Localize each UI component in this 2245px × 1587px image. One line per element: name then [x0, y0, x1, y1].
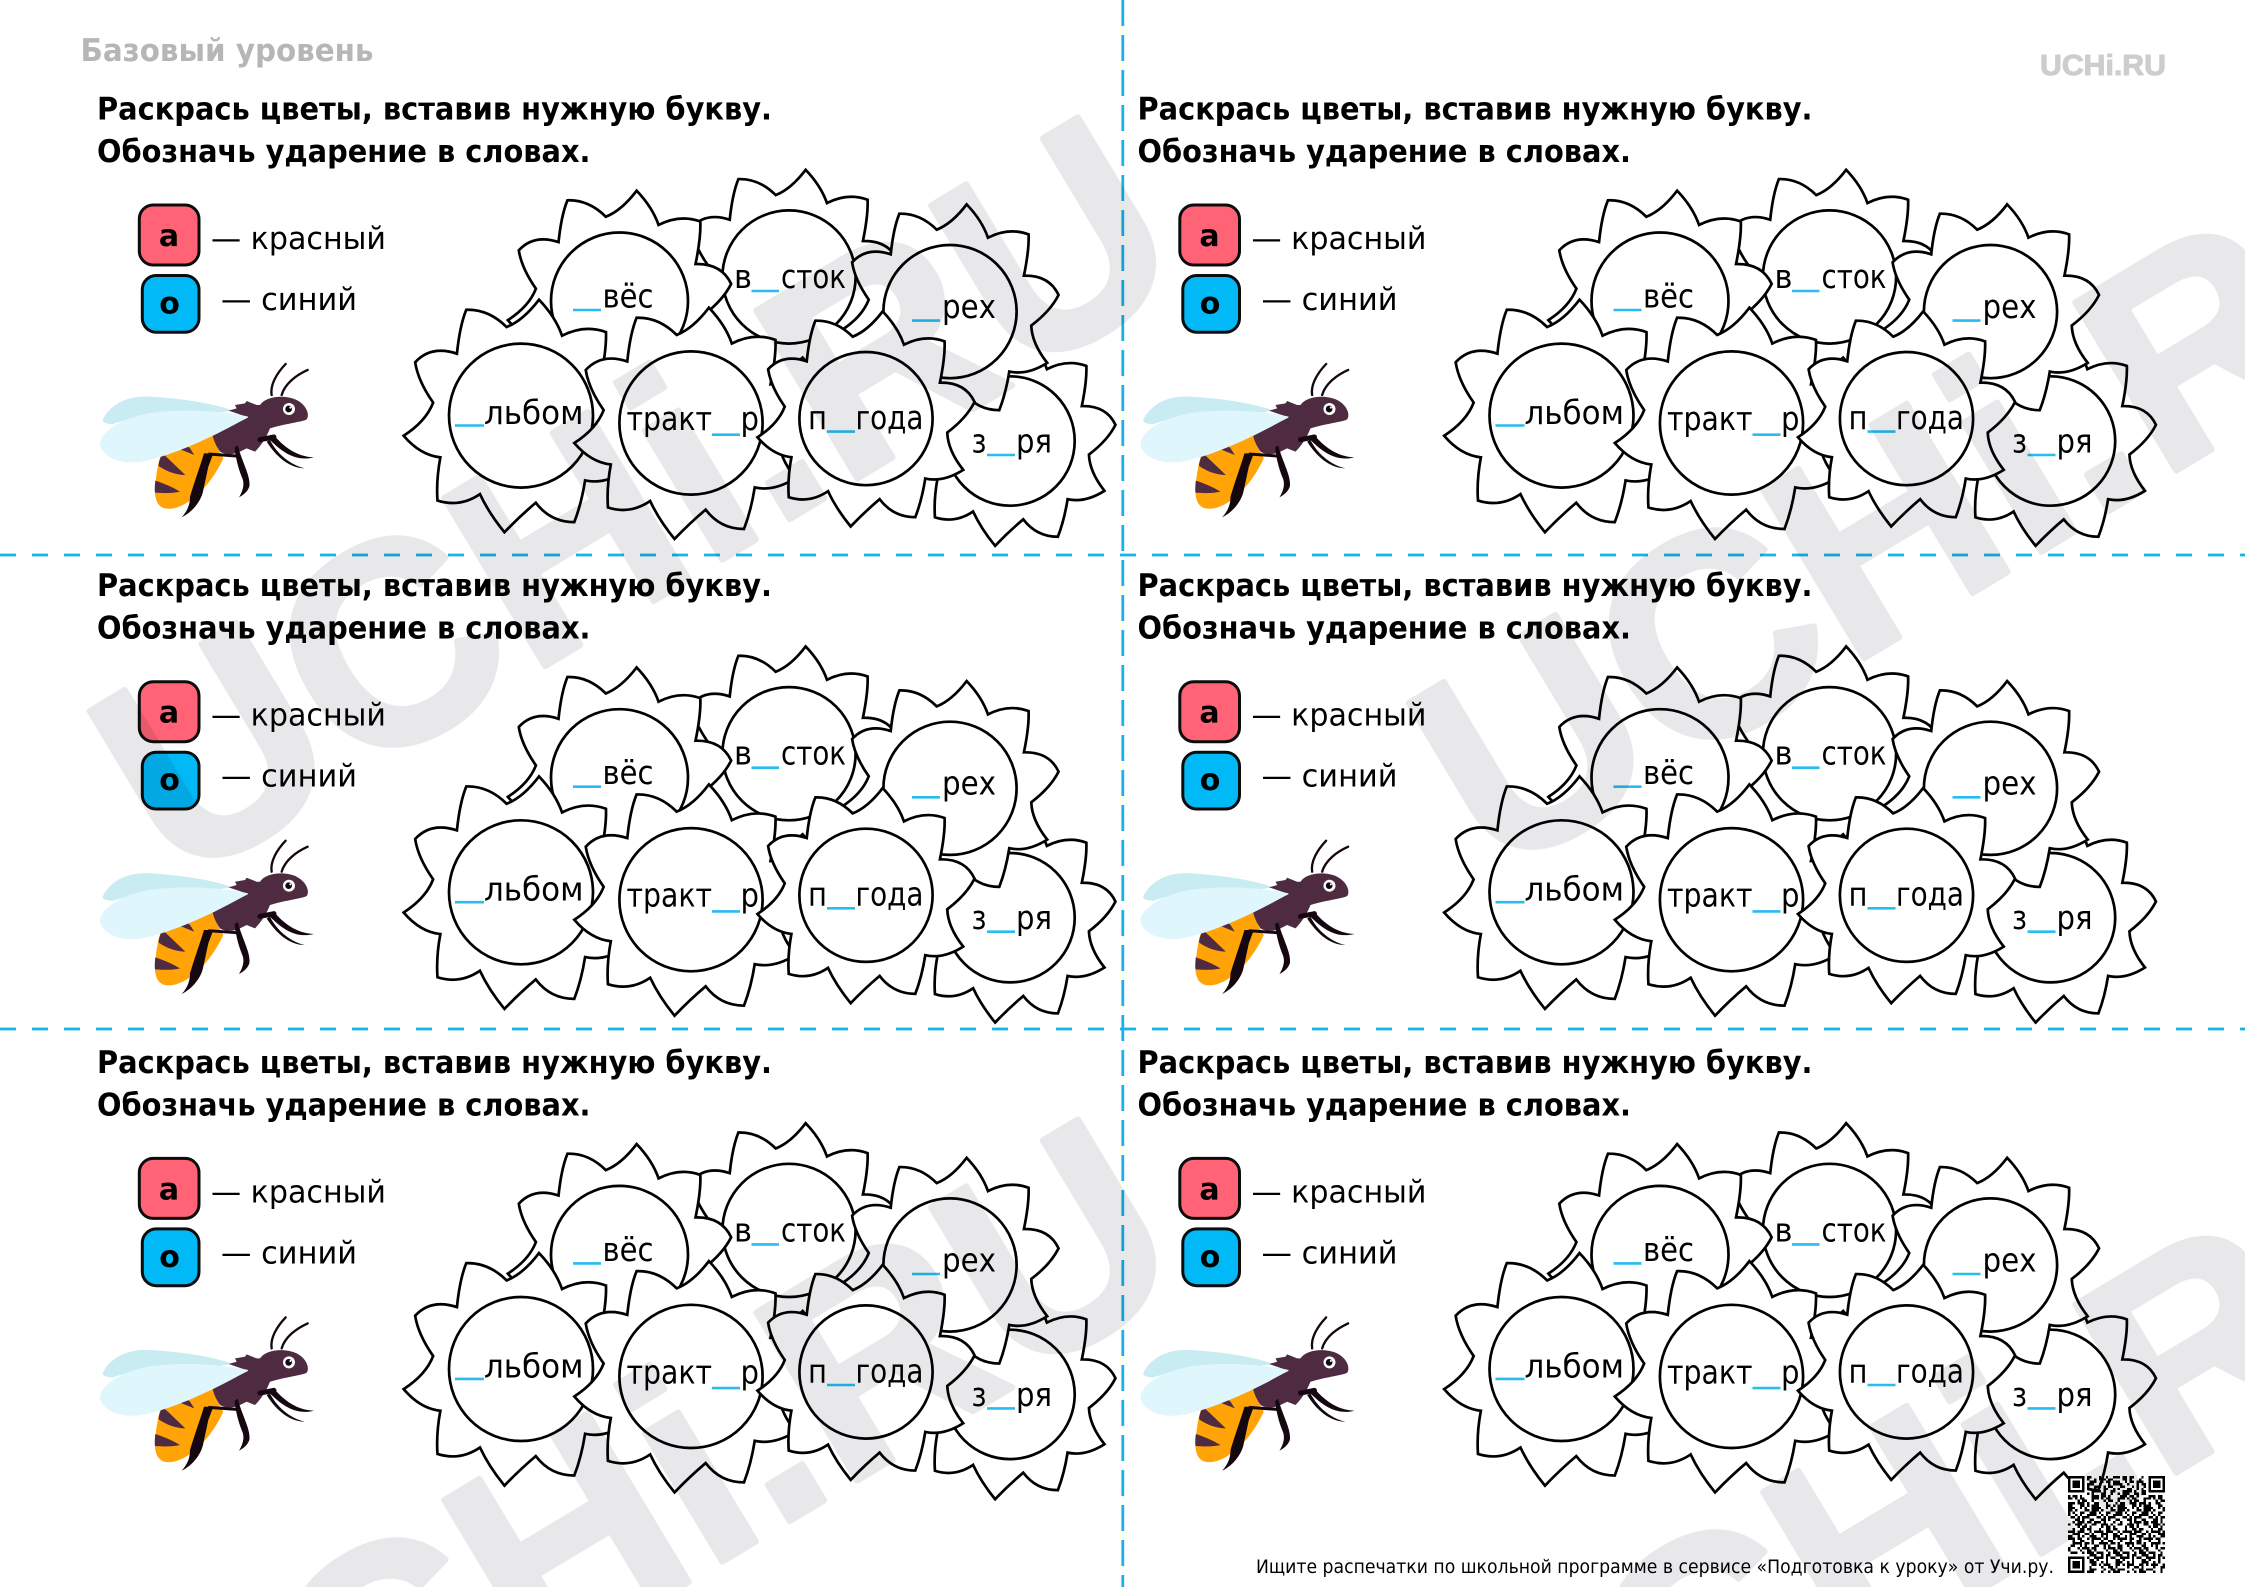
flower: погода: п — [808, 876, 827, 914]
flower: заря — [1945, 337, 2156, 546]
flower: трактор: тракт — [1667, 877, 1752, 915]
flower: погода — [1798, 1265, 2015, 1480]
legend: о — [1200, 763, 1220, 798]
flower: восток — [680, 170, 898, 385]
legend: а — [159, 696, 179, 731]
heading: Обозначь ударение в словах. — [1138, 611, 1631, 647]
heading: Раскрась цветы, вставив нужную букву. — [1138, 92, 1812, 128]
flower: погода — [757, 311, 975, 526]
flower: орех: рех — [1982, 1241, 2036, 1279]
icon: bee — [1140, 364, 1354, 517]
heading: Раскрась цветы, вставив нужную букву. — [97, 568, 772, 604]
flower: орех: рех — [942, 765, 996, 803]
flower: заря: ря — [2056, 899, 2092, 937]
flower: трактор — [574, 784, 808, 1016]
logo: UCHi.RU: UCHi.RU — [2040, 50, 2166, 82]
flower: восток: сток — [781, 1211, 846, 1249]
flower: трактор: р — [1781, 877, 1800, 915]
flower: погода — [1798, 788, 2015, 1003]
flower: альбом — [404, 776, 638, 1009]
legend: — синий — [221, 282, 357, 318]
legend: — красный — [1252, 1174, 1426, 1210]
flower: альбом — [1444, 776, 1679, 1009]
heading: Раскрась цветы, вставив нужную букву. — [97, 92, 772, 128]
watermark: UCHi.RU: UCHi.RU — [44, 56, 1225, 940]
panel: card 6 — [1138, 1045, 2156, 1499]
level label: Базовый уровень — [80, 33, 374, 69]
flower: заря: ря — [1016, 899, 1052, 937]
flower: орех — [841, 681, 1059, 896]
heading: Обозначь ударение в словах. — [1138, 134, 1631, 170]
flower: трактор: р — [740, 877, 759, 915]
flower: восток: сток — [781, 735, 846, 773]
flower: альбом: льбом — [1524, 871, 1624, 909]
flower: восток: в — [734, 1211, 752, 1249]
heading — [97, 1045, 772, 1123]
legend — [1180, 682, 1426, 809]
flower: заря — [905, 337, 1115, 546]
flower: погода: п — [1848, 399, 1868, 437]
flower: трактор: тракт — [1667, 1353, 1752, 1391]
legend — [139, 1158, 386, 1286]
heading — [1138, 1045, 1812, 1123]
flower: восток: сток — [781, 258, 846, 296]
flower: восток: в — [1774, 258, 1792, 296]
flower: трактор: р — [1781, 1353, 1800, 1391]
legend: — красный — [1252, 221, 1426, 257]
legend: — красный — [1252, 698, 1426, 734]
flower: погода: п — [808, 1352, 827, 1390]
flowers — [404, 170, 1115, 546]
flower: альбом: льбом — [484, 394, 584, 432]
flower: погода: года — [856, 876, 924, 914]
icon: bee — [100, 364, 314, 517]
flower: орех: рех — [942, 1241, 996, 1279]
QR code — [2068, 1476, 2165, 1573]
flower: заря — [905, 814, 1115, 1023]
icon: bee — [1140, 1317, 1354, 1471]
flower: погода: п — [1848, 876, 1868, 914]
flower: трактор: р — [740, 400, 759, 438]
heading: Обозначь ударение в словах. — [97, 611, 590, 647]
flower: заря: ря — [1016, 1376, 1052, 1414]
flower: заря: з — [972, 1376, 986, 1414]
flower: трактор — [1615, 784, 1848, 1016]
flower: заря: ря — [1016, 422, 1052, 460]
flower: орех — [1882, 204, 2099, 419]
flower: погода: года — [856, 399, 924, 437]
flower: восток — [1721, 1123, 1938, 1338]
flower: трактор: тракт — [626, 1353, 712, 1391]
flower: трактор: тракт — [626, 877, 712, 915]
flower: трактор: тракт — [1667, 400, 1752, 438]
panel: card 2 — [97, 568, 1115, 1023]
legend: о — [1200, 286, 1220, 322]
flower: овёс — [508, 191, 731, 412]
flower: орех — [841, 204, 1059, 419]
flower: альбом: льбом — [1524, 1347, 1624, 1385]
legend: — красный — [211, 698, 386, 734]
flower: овёс — [508, 1144, 731, 1365]
flower: альбом — [1444, 300, 1679, 532]
flower: трактор — [574, 308, 808, 539]
legend: а — [1199, 1172, 1220, 1207]
icon: bee — [100, 1317, 314, 1471]
flower: заря — [1945, 814, 2156, 1023]
heading: Обозначь ударение в словах. — [97, 1087, 590, 1123]
flower: альбом — [404, 300, 638, 532]
heading: Обозначь ударение в словах. — [1138, 1087, 1631, 1123]
flowers — [1444, 646, 2156, 1023]
legend: о — [159, 1240, 180, 1275]
flower: орех — [1882, 681, 2099, 896]
legend: — красный — [211, 221, 386, 257]
flower: альбом: льбом — [484, 1347, 584, 1385]
flower: заря: з — [2012, 422, 2027, 460]
flower: трактор — [1615, 1261, 1848, 1492]
legend: о — [159, 763, 180, 798]
flower: трактор — [574, 1261, 808, 1492]
heading — [97, 92, 772, 170]
flower: овёс: вёс — [602, 278, 654, 316]
flower: погода: года — [856, 1352, 924, 1390]
flowers — [1444, 170, 2156, 546]
flower: восток — [680, 646, 898, 862]
flower: овёс — [1548, 1144, 1772, 1365]
flower: погода: года — [1896, 399, 1964, 437]
flower: восток: сток — [1822, 735, 1886, 773]
flower: заря: з — [2012, 1376, 2027, 1414]
legend: — синий — [1262, 759, 1398, 795]
flower: трактор — [1615, 308, 1848, 539]
flower: погода — [757, 1265, 975, 1480]
flower: заря — [1945, 1290, 2156, 1499]
legend: — синий — [221, 1235, 357, 1271]
flower: восток: в — [734, 258, 752, 296]
flower: овёс — [1548, 191, 1772, 412]
flower: орех: рех — [1982, 765, 2036, 803]
flower: восток: в — [734, 735, 752, 773]
heading — [1138, 92, 1812, 170]
flower: погода: года — [1896, 876, 1964, 914]
legend: о — [159, 286, 180, 322]
heading: Обозначь ударение в словах. — [97, 134, 590, 170]
flower: орех: рех — [1982, 288, 2036, 326]
heading — [97, 568, 772, 647]
flower: заря: з — [2012, 899, 2027, 937]
legend — [1180, 1158, 1426, 1286]
flower: овёс: вёс — [1643, 278, 1694, 316]
legend: а — [159, 219, 179, 254]
legend: о — [1200, 1240, 1220, 1275]
flower: заря: ря — [2056, 422, 2092, 460]
flower: овёс — [508, 667, 731, 889]
heading — [1138, 568, 1812, 647]
flower: восток: сток — [1822, 258, 1886, 296]
panel: card 4 — [1138, 92, 2156, 546]
flower: восток: в — [1774, 735, 1792, 773]
legend: а — [159, 1172, 179, 1207]
flower: заря — [905, 1290, 1115, 1499]
flower: овёс: вёс — [602, 1231, 654, 1269]
flower: альбом — [404, 1253, 638, 1486]
flower: орех — [841, 1158, 1059, 1373]
icon: bee — [1140, 841, 1354, 994]
panel: card 1 — [97, 92, 1115, 546]
flower: восток — [680, 1123, 898, 1338]
legend: а — [1199, 219, 1220, 254]
legend — [1180, 205, 1426, 332]
flower: альбом: льбом — [484, 871, 584, 909]
legend — [139, 205, 386, 332]
heading: Раскрась цветы, вставив нужную букву. — [97, 1045, 772, 1081]
flower: восток — [1721, 646, 1938, 862]
flower: погода: года — [1896, 1352, 1964, 1390]
flower: трактор: тракт — [626, 400, 712, 438]
flower: трактор: р — [740, 1353, 759, 1391]
footer note: Ищите распечатки по школьной программе в сервисе «Подготовка к уроку» от Учи.ру. — [1256, 1557, 2054, 1578]
heading: Раскрась цветы, вставив нужную букву. — [1138, 1045, 1812, 1081]
flower: орех: рех — [942, 288, 996, 326]
flowers — [404, 646, 1115, 1023]
flower: альбом: льбом — [1524, 394, 1624, 432]
legend: — синий — [221, 759, 357, 795]
flower: орех — [1882, 1158, 2099, 1373]
flower: погода: п — [808, 399, 827, 437]
flower: погода: п — [1848, 1352, 1868, 1390]
icon: bee — [100, 841, 314, 994]
flower: альбом — [1444, 1253, 1679, 1486]
panel: card 5 — [1138, 568, 2156, 1023]
flower: овёс: вёс — [602, 754, 654, 792]
flower: погода — [757, 788, 975, 1003]
flowers — [1444, 1123, 2156, 1499]
flower: восток: в — [1774, 1211, 1792, 1249]
panel: card 3 — [97, 1045, 1115, 1499]
flower: заря: ря — [2056, 1376, 2092, 1414]
legend: — синий — [1262, 282, 1398, 318]
flower: восток — [1721, 170, 1938, 385]
legend: а — [1199, 696, 1220, 731]
flower: трактор: р — [1781, 400, 1800, 438]
flower: заря: з — [972, 899, 986, 937]
flowers — [404, 1123, 1115, 1499]
flower: овёс: вёс — [1643, 1231, 1694, 1269]
flower: восток: сток — [1822, 1211, 1886, 1249]
heading: Раскрась цветы, вставив нужную букву. — [1138, 568, 1812, 604]
legend: — красный — [211, 1174, 386, 1210]
legend — [139, 682, 386, 809]
flower: погода — [1798, 311, 2015, 526]
flower: овёс: вёс — [1643, 754, 1694, 792]
flower: овёс — [1548, 667, 1772, 889]
legend: — синий — [1262, 1235, 1398, 1271]
flower: заря: з — [972, 422, 986, 460]
